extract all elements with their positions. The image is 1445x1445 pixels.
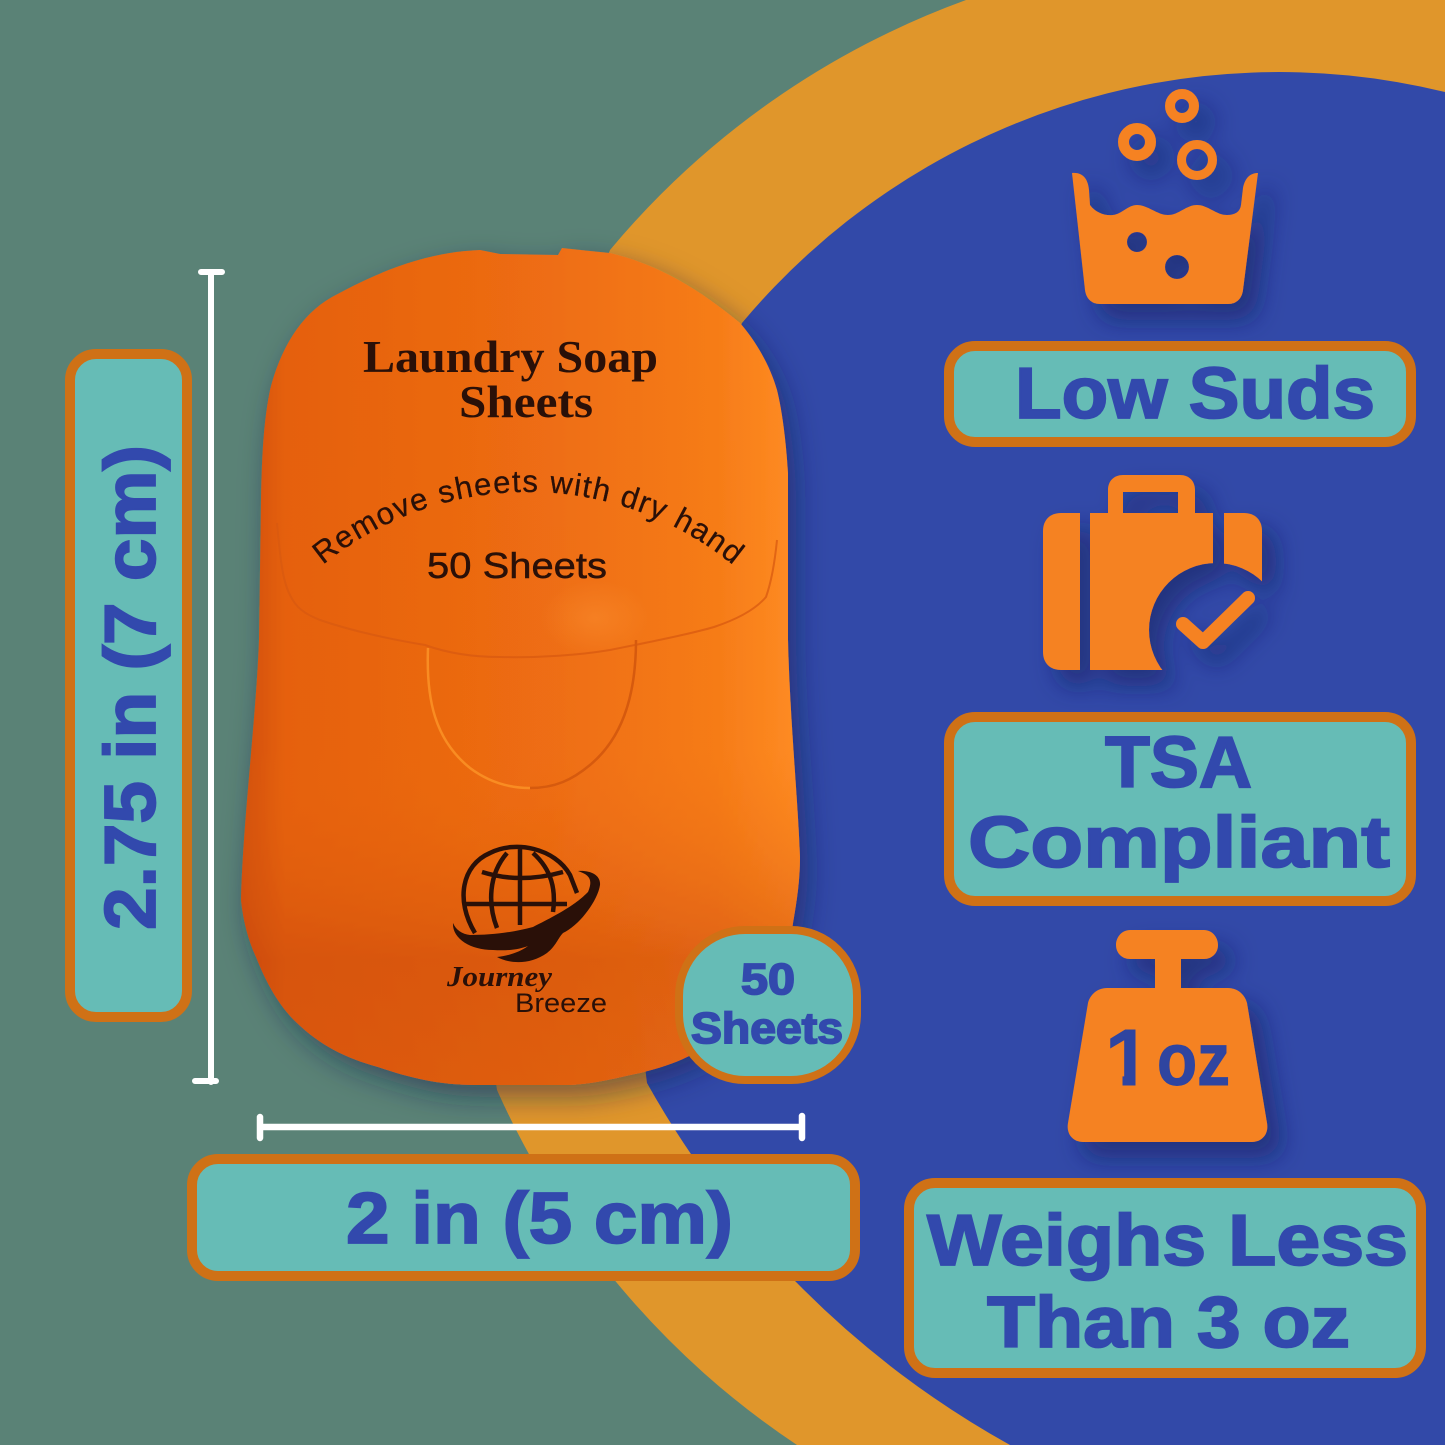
50 sheets badge — [679, 930, 857, 1080]
width label — [192, 1159, 855, 1276]
height dimension line — [195, 272, 222, 1082]
label: weighs less than 3 oz — [909, 1183, 1421, 1373]
soap sheet packet — [234, 246, 822, 1116]
logo word: Journey: Journey — [446, 962, 553, 993]
label: weighs less than 3 oz: Than 3 oz — [987, 1283, 1350, 1363]
packet body — [241, 248, 800, 1085]
label: weighs less than 3 oz: Weighs Less — [927, 1201, 1408, 1281]
packet flap — [277, 523, 777, 657]
width label: 2 in (5 cm) — [346, 1179, 733, 1259]
packet subtitle: Sheets — [459, 376, 593, 427]
icon: weight 1 oz: 1 — [1105, 1013, 1152, 1102]
label: TSA compliant — [949, 717, 1411, 901]
icon: wash basin with bubbles — [1072, 94, 1258, 304]
50 sheets badge: Sheets — [691, 1004, 843, 1053]
label: low suds — [949, 346, 1411, 442]
icon: weight 1 oz — [1068, 930, 1267, 1142]
label: TSA compliant: TSA — [1105, 723, 1252, 803]
height label — [70, 354, 187, 1017]
label: low suds: Low Suds — [1015, 354, 1375, 434]
logo word: Breeze: Breeze — [515, 988, 607, 1018]
blue circle — [600, 72, 1445, 1445]
yellow ring — [440, 0, 1445, 1445]
thumb cutout — [428, 640, 636, 788]
sheet count on packet: 50 Sheets — [427, 545, 607, 586]
packet title: Laundry Soap — [363, 331, 658, 382]
width dimension line — [260, 1116, 802, 1138]
height label: 2.75 in (7 cm) — [91, 445, 171, 930]
50 sheets badge: 50 — [741, 955, 795, 1004]
icon: suitcase with check — [1043, 475, 1262, 670]
logo: globe and swoosh — [453, 847, 600, 962]
curved instruction: Remove sheets with dry hand — [312, 472, 746, 564]
icon: weight 1 oz: oz — [1157, 1018, 1230, 1101]
label: TSA compliant: Compliant — [968, 803, 1390, 883]
